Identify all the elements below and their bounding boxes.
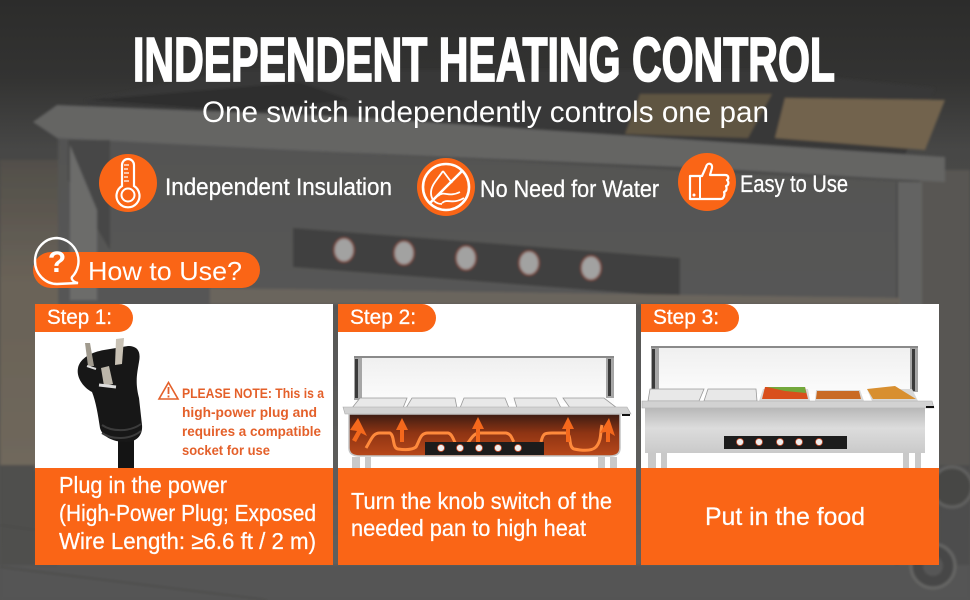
- step 2 instruction: needed pan to high heat: [351, 515, 587, 541]
- feature: easy to use: [678, 153, 848, 211]
- step 3 instruction: Put in the food: [705, 503, 865, 531]
- step 1 instruction: (High-Power Plug; Exposed: [59, 500, 316, 526]
- feature: no need for water: [417, 158, 659, 216]
- icon: warning triangle: [159, 382, 178, 399]
- panel: step 1: [35, 304, 333, 565]
- step 1 tab: [35, 304, 133, 332]
- step 3 tab: [641, 304, 739, 332]
- note with warning icon: socket for use: [182, 442, 270, 458]
- subtitle: One switch independently controls one pan: [202, 96, 769, 129]
- panel: step 3: [641, 304, 939, 565]
- icon: question bubble: [35, 238, 79, 284]
- note with warning icon: PLEASE NOTE: This is a: [182, 385, 324, 401]
- step 2 tab: Step 2:: [350, 306, 416, 329]
- step 1 instruction: Wire Length: ≥6.6 ft / 2 m): [59, 528, 316, 554]
- label: Independent Insulation: [165, 174, 392, 201]
- feature: independent insulation: [99, 154, 392, 212]
- icon: thermometer: [99, 154, 157, 212]
- label: How to Use?: [88, 256, 242, 286]
- icon: thumbs up: [678, 153, 736, 211]
- step 2 instruction: Turn the knob switch of the: [351, 488, 612, 514]
- note with warning icon: high-power plug and: [182, 404, 317, 420]
- step 1 tab: Step 1:: [47, 306, 112, 329]
- icon: crossed water: [417, 158, 475, 216]
- icon: question bubble: ?: [48, 246, 66, 279]
- step 2 tab: [338, 304, 436, 332]
- note with warning icon: [159, 382, 328, 458]
- step 3 tab: Step 3:: [653, 306, 719, 329]
- food warmer with food: [642, 346, 934, 468]
- note with warning icon: requires a compatible: [182, 423, 321, 439]
- food warmer with heating coil: [343, 356, 631, 468]
- label: Easy to Use: [740, 171, 848, 198]
- label: No Need for Water: [480, 176, 659, 203]
- icon: power plug: [78, 338, 142, 468]
- step 1 instruction: Plug in the power: [59, 472, 227, 498]
- panel: step 2: [338, 304, 636, 565]
- heading: how to use: [33, 238, 260, 288]
